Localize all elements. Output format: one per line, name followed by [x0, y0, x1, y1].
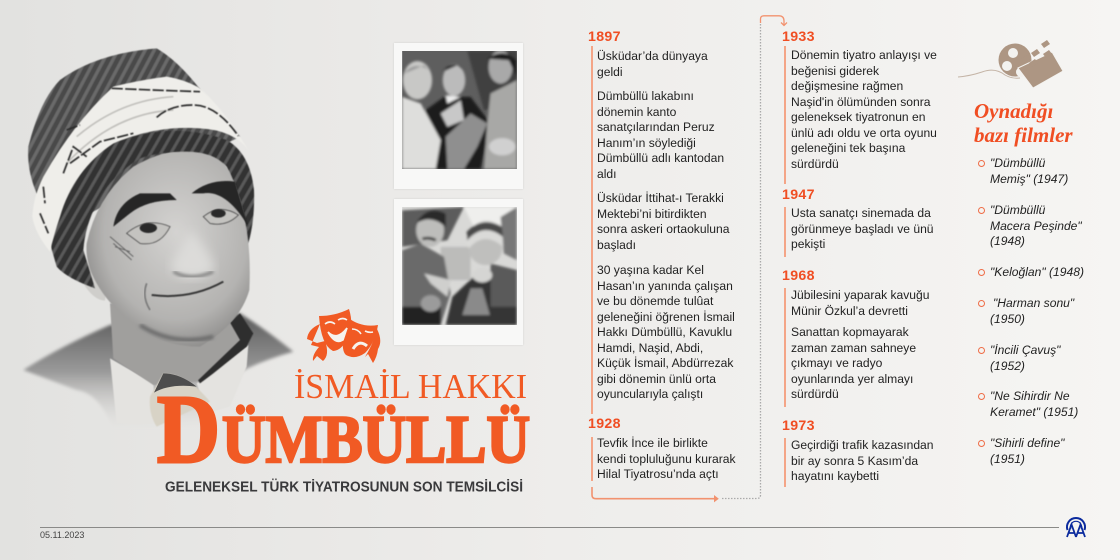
surname: [157, 376, 530, 484]
film 6: [978, 389, 1078, 419]
film 2: Macera Peşinde": [990, 219, 1082, 233]
film 6: "Ne Sihirdir Ne: [990, 389, 1070, 403]
text: 1933: Naşid'in ölümünden sonra: [791, 95, 930, 109]
shoulders: [23, 313, 293, 430]
text: 1968 later: oyunlarında yer almayı: [791, 372, 913, 386]
text: birth: Üsküdar’da dünyaya: [597, 49, 708, 63]
headscarf: [32, 77, 248, 252]
text: early career: 30 yaşına kadar Kel: [597, 263, 704, 277]
text: 1968 later: çıkmayı ve radyo: [791, 356, 882, 370]
neck: [110, 303, 240, 385]
text: 1928: [597, 436, 736, 481]
text: early career: Hasan’ın yanında çalışan: [597, 279, 733, 293]
rule 1928: [591, 437, 593, 481]
heading: films: Oynadığı: [974, 99, 1053, 123]
text: 1968 jubilee: Jübilesini yaparak kavuğu: [791, 288, 930, 302]
text: 1933: geleneğini tek başına: [791, 141, 905, 155]
text: 1968 jubilee: [791, 288, 930, 318]
year 1928: 1928: [588, 416, 621, 432]
text: nickname: dönemin kanto: [597, 105, 676, 119]
text: 1968 later: zaman zaman sahneye: [791, 341, 916, 355]
year 1933: 1933: [782, 29, 815, 45]
text: early career: Hamdi, Naşid, Abdi,: [597, 341, 703, 355]
rule 1968: [784, 288, 786, 407]
text: early career: gibi dönemin ünlü orta: [597, 372, 716, 386]
text: 1973: Geçirdiği trafik kazasından: [791, 438, 934, 452]
portrait of İsmail Hakkı Dümbüllü: [23, 48, 294, 426]
film 4: [978, 296, 1075, 326]
rule 1947: [784, 207, 786, 257]
timeline column 2: [782, 29, 937, 487]
text: birth: geldi: [597, 65, 623, 79]
text: 1968 jubilee: Münir Özkul’a devretti: [791, 304, 908, 318]
rule 1933: [784, 46, 786, 184]
footer date: 05.11.2023: [40, 530, 84, 540]
film 7: [978, 436, 1065, 466]
text: 1928: kendi topluluğunu kurarak: [597, 452, 736, 466]
film 2: "Dümbüllü: [990, 203, 1045, 217]
photo frame: three men: [394, 43, 523, 189]
text: schooling: [597, 191, 730, 252]
film 3: "Keloğlan" (1948): [990, 265, 1084, 279]
text: early career: geleneğini öğrenen İsmail: [597, 310, 735, 324]
year 1947: 1947: [782, 187, 815, 203]
cap roll: [50, 131, 254, 288]
text: early career: oyuncularıyla çalıştı: [597, 387, 703, 401]
text: 1933: ünlü adı oldu ve orta oyunu: [791, 126, 937, 140]
film 1: [978, 156, 1068, 186]
film 4: (1950): [990, 312, 1025, 326]
text: 1933: beğenisi giderek: [791, 64, 879, 78]
year 1968: 1968: [782, 268, 815, 284]
text: 1973: [791, 438, 934, 483]
text: nickname: Dümbüllü lakabını: [597, 89, 694, 103]
text: 1933: sürdürdü: [791, 157, 839, 171]
text: nickname: aldı: [597, 167, 616, 181]
film 6: Keramet" (1951): [990, 405, 1078, 419]
icon: film reel and clapperboard: [958, 40, 1062, 88]
film 1: "Dümbüllü: [990, 156, 1045, 170]
face: [86, 149, 250, 347]
scarf pattern: [40, 88, 238, 233]
text: schooling: Üsküdar İttihat-ı Terakki: [597, 191, 724, 205]
film 5: "İncili Çavuş": [990, 343, 1060, 357]
photo frame: two actors: [394, 199, 523, 345]
title: İsmail Hakkı Dümbüllü: [157, 367, 530, 470]
footer rule: [40, 526, 1059, 528]
film 2: (1948): [990, 234, 1025, 248]
nose: [170, 230, 215, 279]
text: nickname: sanatçılarından Peruz: [597, 120, 715, 134]
knot of scarf: [150, 373, 210, 427]
text: early career: [597, 263, 735, 401]
ear: [75, 251, 107, 301]
collar shirt: [110, 345, 248, 423]
text: 1933: geleneksek tiyatronun en: [791, 110, 925, 124]
icon: theatre masks: [307, 309, 380, 363]
eyes: [127, 210, 238, 244]
text: 1947: görünmeye başladı ve ünü: [791, 222, 934, 236]
timeline connectors: [591, 15, 788, 502]
text: 1973: hayatını kaybetti: [791, 469, 879, 483]
photo: street scene: [402, 207, 517, 325]
film 7: (1951): [990, 452, 1025, 466]
text: 1968 later: sürdürdü: [791, 387, 839, 401]
text: 1933: [791, 48, 937, 171]
text: 1947: [791, 206, 934, 251]
text: early career: Hakkı Dümbüllü, Kavuklu: [597, 325, 732, 339]
text: nickname: [597, 89, 724, 181]
film 7: "Sihirli define": [990, 436, 1064, 450]
rule 1897: [591, 46, 593, 414]
year 1973: 1973: [782, 418, 815, 434]
photo: stage scene: [402, 51, 517, 169]
film 5: (1952): [990, 359, 1025, 373]
text: schooling: sonra askeri ortaokuluna: [597, 222, 729, 236]
scarf folds: [67, 97, 173, 163]
text: early career: Küçük İsmail, Abdürrezak: [597, 356, 733, 370]
text: 1947: Usta sanatçı sinemada da: [791, 206, 931, 220]
text: birth: [597, 49, 708, 79]
text: 1973: bir ay sonra 5 Kasım’da: [791, 454, 918, 468]
text: nickname: Hanım’ın söylediği: [597, 136, 696, 150]
smile: [152, 282, 223, 296]
cap dome: [28, 48, 240, 217]
film list: [978, 156, 1084, 466]
film 5: [978, 343, 1061, 373]
text: 1928: Hilal Tiyatrosu’nda açtı: [597, 467, 719, 481]
heading: films: bazı filmler: [974, 123, 1073, 147]
text: 1968 later: [791, 325, 916, 401]
rule 1973: [784, 438, 786, 487]
text: schooling: başladı: [597, 238, 636, 252]
text: early career: ve bu dönemde tulûat: [597, 294, 713, 308]
heading: films: [974, 99, 1073, 147]
text: 1928: Tevfik İnce ile birlikte: [597, 436, 708, 450]
film 4: "Harman sonu": [993, 296, 1074, 310]
text: 1933: değişmesine rağmen: [791, 79, 903, 93]
timeline column 1: [588, 29, 736, 481]
text: 1933: Dönemin tiyatro anlayışı ve: [791, 48, 937, 62]
eyebrows: [113, 181, 248, 227]
film 1: Memiş" (1947): [990, 172, 1068, 186]
year 1897: 1897: [588, 29, 621, 45]
film 2: [978, 203, 1082, 248]
text: 1947: pekişti: [791, 237, 825, 251]
text: schooling: Mektebi’ni bitirdikten: [597, 207, 707, 221]
logo: AA: [1066, 517, 1086, 538]
name line: İSMAİL HAKKI: [294, 367, 527, 406]
text: nickname: Dümbüllü adlı kantodan: [597, 151, 724, 165]
text: 1968 later: Sanattan kopmayarak: [791, 325, 909, 339]
